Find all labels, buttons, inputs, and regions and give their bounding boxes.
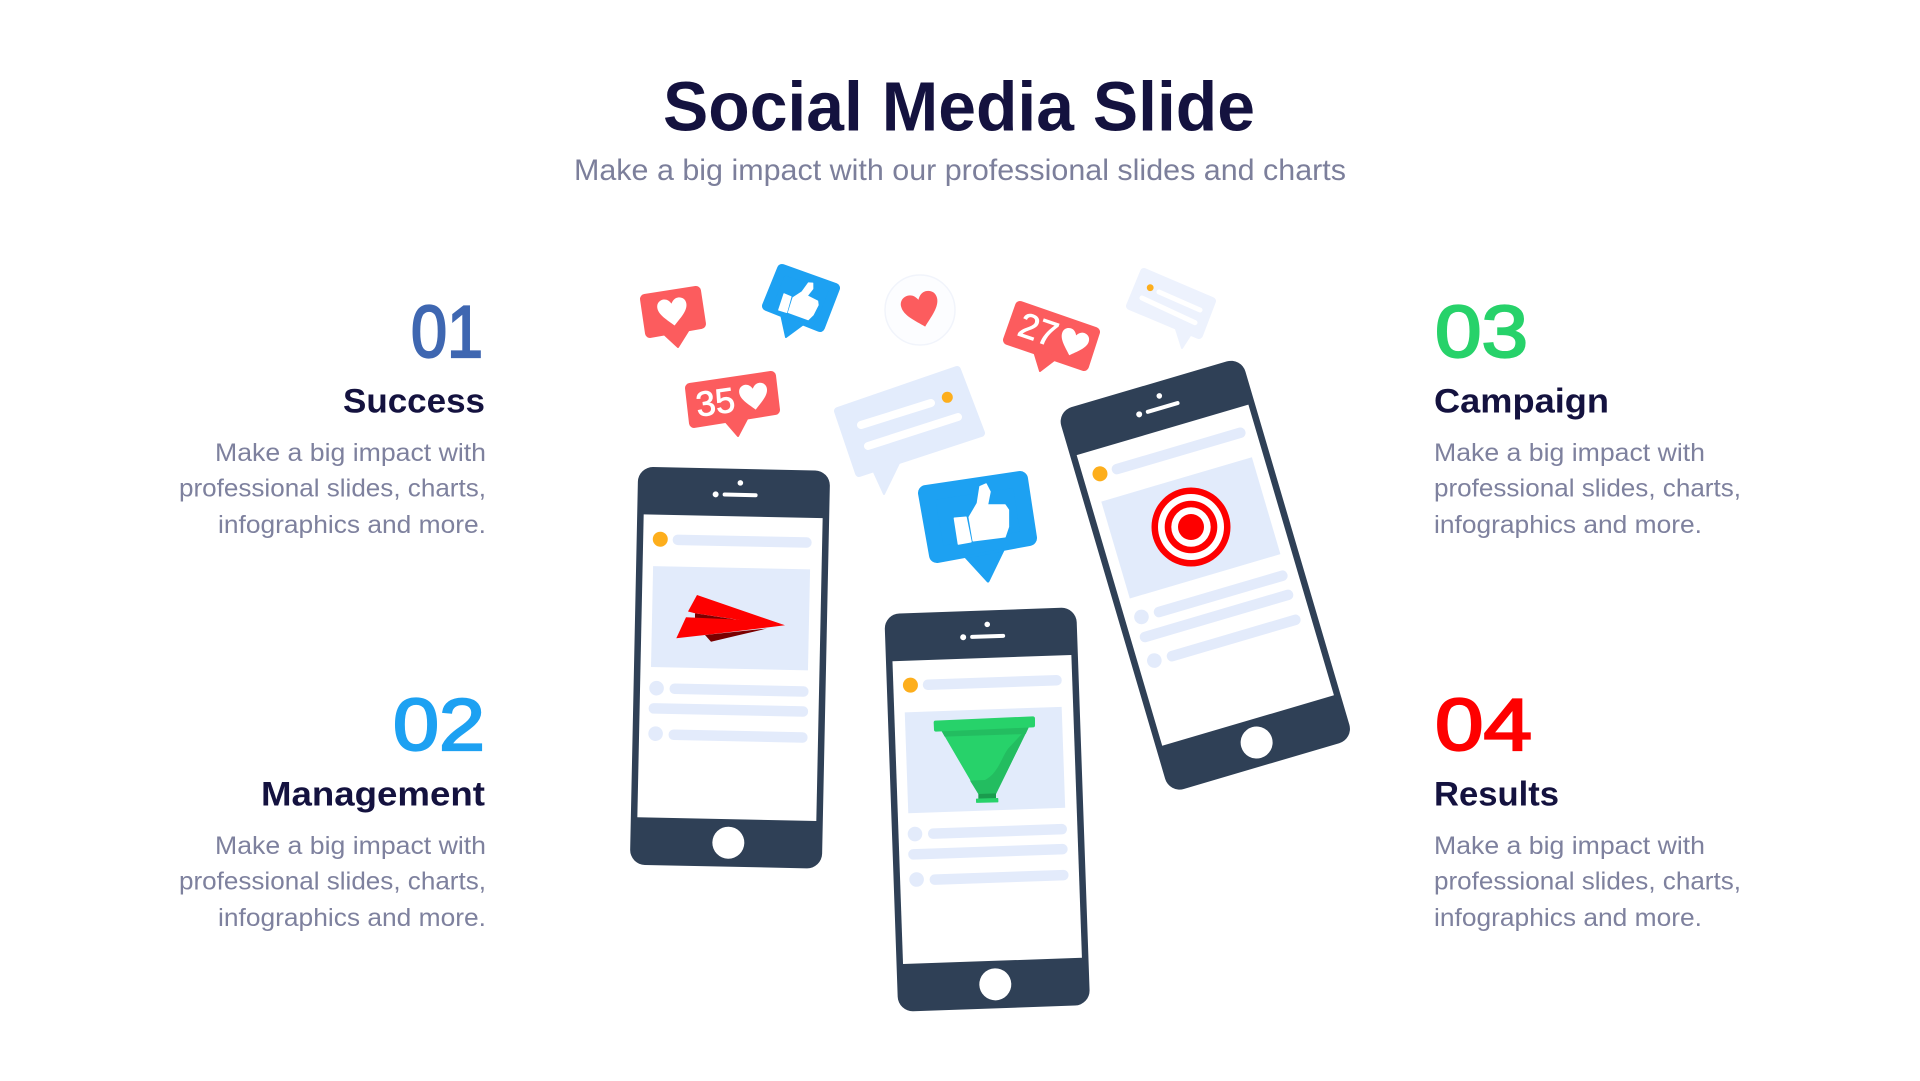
subtitle: Make a big impact with our professional slides and charts [574,154,1346,187]
icon: 35 likes bubble: 35 [693,381,737,425]
icon: small like bubble [767,269,835,337]
text block: Results description: professional slides, charts, [1434,868,1741,896]
number 01: 01 [411,292,483,373]
icon: large comment bubble [838,370,981,494]
text block: Results description: Make a big impact with [1434,832,1705,860]
icon: funnel [934,716,1035,803]
icon: paper plane [676,595,785,642]
icon: 27 likes bubble [1008,305,1095,371]
panel: 04 Results [1434,685,1741,932]
icon: heart speech bubble [645,291,701,347]
text block: Management description: infographics and more. [218,904,486,932]
icon: 35 likes bubble [690,376,775,436]
text block: Success description: Make a big impact with [215,439,486,467]
text block: Campaign description [1434,439,1741,539]
text block: Success description: infographics and more. [218,511,486,539]
icon: heart in circle [885,275,955,345]
icon: light comment bubble top right [1130,272,1212,348]
title: Social Media Slide [663,68,1255,146]
text block: Results description: infographics and more. [1434,904,1702,932]
panel: 01 Success [179,292,486,539]
text block: Management description: Make a big impact with [215,832,486,860]
panel: 03 Campaign [1434,292,1741,539]
heading: Management: Management [261,776,485,814]
text block: Campaign description: Make a big impact with [1434,439,1705,467]
phone: target post [1057,357,1354,793]
text block: Campaign description: professional slides, charts, [1434,475,1741,503]
number 02: 02 [393,685,485,766]
phone: funnel post [884,607,1090,1012]
number 04: 04 [1435,685,1532,766]
heading: Results: Results [1434,776,1559,814]
text block: Management description: professional slides, charts, [179,868,486,896]
phone: paper plane post [630,467,830,869]
text block: Success description [179,439,486,539]
heading: Campaign: Campaign [1434,383,1609,421]
icon: large like bubble [926,479,1029,581]
text block: Results description [1434,832,1741,932]
text block: Campaign description: infographics and more. [1434,511,1702,539]
text block: Success description: professional slides, charts, [179,475,486,503]
heading: Success: Success [343,383,485,421]
icon: target [1152,488,1230,566]
icon: 27 likes bubble: 27 [1013,305,1063,355]
text block: Management description [179,832,486,932]
panel: 02 Management [179,685,486,932]
number 03: 03 [1435,292,1528,373]
